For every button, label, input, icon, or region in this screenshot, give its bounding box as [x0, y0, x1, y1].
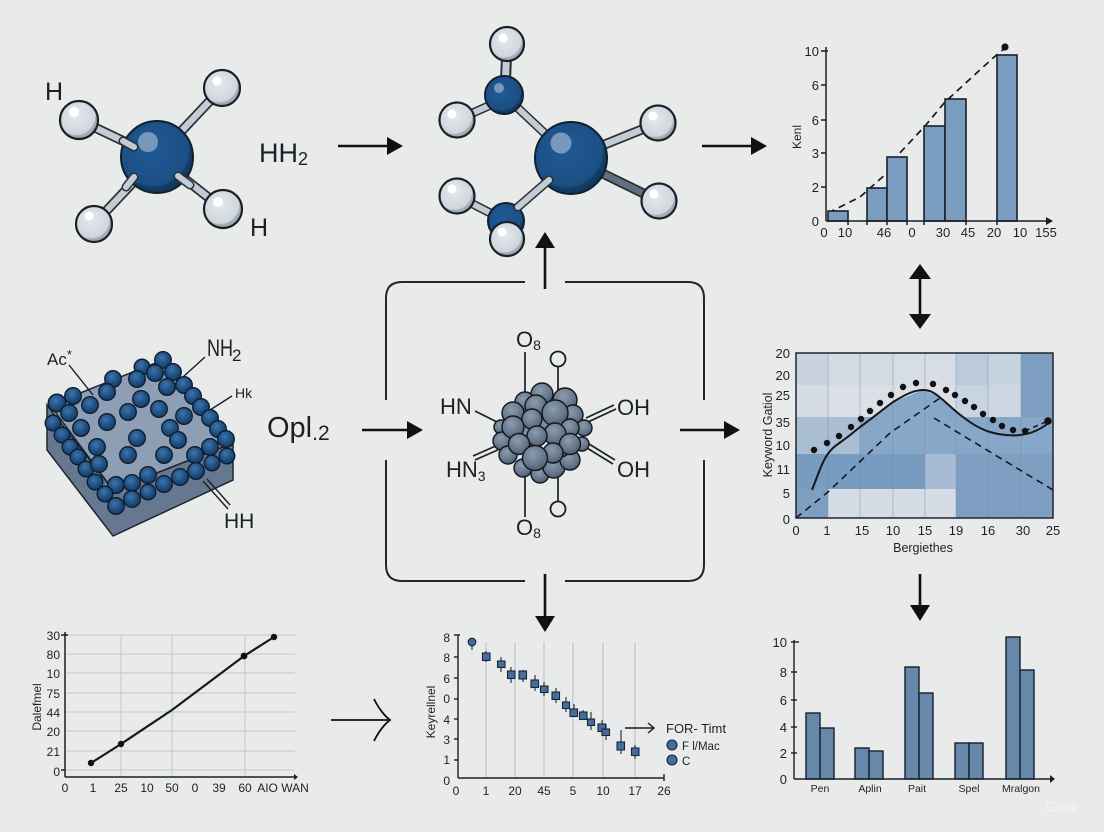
- scatter chart: bottom center: 26: [657, 784, 671, 798]
- legend: FOR- Timt: C: [682, 756, 690, 768]
- axis labels: 5: [783, 486, 790, 501]
- axis labels: 10: [805, 44, 819, 59]
- line chart: bottom left: 44: [47, 706, 60, 720]
- axis labels: 30: [1016, 523, 1030, 538]
- label: Ac*: *: [67, 347, 72, 362]
- axis labels: 16: [981, 523, 995, 538]
- axis labels: 20: [776, 368, 790, 383]
- scatter chart: bottom center: 20: [508, 784, 522, 798]
- line chart: bottom left: 30: [47, 629, 60, 643]
- axis labels: 0: [908, 225, 916, 240]
- curves: [796, 398, 940, 518]
- arrow: to top bar chart: [702, 137, 767, 155]
- legend: FOR- Timt: FOR- Timt: [666, 721, 726, 736]
- arrow: down from frame: [535, 574, 555, 632]
- bar chart: bottom right: 8: [780, 665, 787, 680]
- axes: [821, 47, 1046, 225]
- bar chart: bottom right: 0: [780, 772, 787, 787]
- scatter chart: bottom center: 8: [443, 651, 450, 665]
- bar chart: top right: [790, 43, 1057, 240]
- label: OH top: OH: [617, 395, 650, 420]
- axis labels: 10: [838, 225, 852, 240]
- label: O3 top: O: [516, 327, 533, 352]
- bar chart: bottom right: 10: [773, 635, 787, 650]
- line chart: bottom left: 0: [62, 781, 69, 795]
- data points: [468, 638, 639, 756]
- line chart: bottom left: 1: [90, 781, 97, 795]
- watermark: Grok: [1046, 799, 1079, 816]
- scatter chart: bottom center: [424, 631, 671, 798]
- scatter chart: bottom center: 0: [453, 784, 460, 798]
- axis labels: 6: [812, 78, 819, 93]
- line chart: bottom left: 21: [47, 745, 60, 759]
- axis labels: 0: [820, 225, 828, 240]
- axis labels: 11: [776, 462, 790, 477]
- label: OH bottom: OH: [617, 457, 650, 482]
- line chart: bottom left: 10: [47, 667, 60, 681]
- line chart: bottom left: 75: [47, 687, 60, 701]
- bar chart: bottom right: Aplin: [858, 783, 882, 795]
- axis labels: 0: [792, 523, 800, 538]
- line chart: bottom left: 10: [140, 781, 154, 795]
- axis labels: 10: [886, 523, 900, 538]
- label: Opl2: .2: [312, 422, 330, 445]
- arrow: up from frame: [535, 232, 555, 289]
- scatter chart: bottom center: 6: [443, 672, 450, 686]
- label: Opl2: Opl: [267, 412, 312, 444]
- axis labels: 25: [1046, 523, 1060, 538]
- frame: rounded bracket around nanoparticle: [386, 282, 704, 581]
- axis labels: 20: [987, 225, 1001, 240]
- bar chart: bottom right: Mralgon: [1002, 783, 1040, 795]
- line chart: bottom left: Dalefmel: [30, 683, 44, 731]
- scatter chart: bottom center: 1: [483, 784, 490, 798]
- line chart: bottom left: 25: [114, 781, 128, 795]
- heat chart: middle right: [761, 346, 1060, 555]
- axis labels: [790, 44, 1057, 240]
- heat cells: [796, 353, 1053, 518]
- bar chart: bottom right: 6: [780, 693, 787, 708]
- axis labels: 19: [949, 523, 963, 538]
- axis labels: 15: [855, 523, 869, 538]
- label: HN3: HN: [446, 457, 478, 482]
- scatter chart: bottom center: 0: [443, 692, 450, 706]
- axis labels: 0: [783, 512, 790, 527]
- axis labels: 3: [812, 146, 819, 161]
- arrow: down from heat chart: [910, 574, 930, 621]
- label: HN3: 3: [478, 468, 486, 484]
- label: O3 bottom: 8: [533, 525, 541, 541]
- axis labels: 10: [1013, 225, 1027, 240]
- axis labels: Keyword Gatiol: [761, 393, 775, 477]
- label: H bottom right: H: [250, 214, 268, 242]
- bar chart: bottom right: Pait: [908, 783, 926, 795]
- bar chart: bottom right: [773, 635, 1055, 795]
- label: HH2: 2: [298, 149, 308, 169]
- scatter chart: bottom center: Keyrellnel: [424, 686, 438, 738]
- bar chart: bottom right: 4: [780, 720, 787, 735]
- bar chart: bottom right: Spel: [958, 783, 980, 795]
- axis labels: Kenl: [790, 125, 804, 149]
- line chart: bottom left: AIO WAN: [257, 781, 309, 795]
- callout lines: [69, 357, 232, 509]
- axis labels: 2: [812, 180, 819, 195]
- label: Ac*: Ac: [47, 350, 67, 369]
- arrow: to frame: [362, 421, 423, 439]
- label: NH2 subscript: 2: [232, 346, 241, 365]
- scatter chart: bottom center: 4: [443, 713, 450, 727]
- scatter chart: bottom center: 1: [443, 753, 450, 767]
- dashed trend: [828, 48, 1005, 213]
- label: HH2: HH: [259, 138, 298, 168]
- axis labels: 15: [918, 523, 932, 538]
- scatter chart: bottom center: 45: [537, 784, 551, 798]
- line chart: bottom left: 80: [47, 648, 60, 662]
- axis labels: 25: [776, 388, 790, 403]
- scatter chart: bottom center: 17: [628, 784, 642, 798]
- axis labels: 46: [877, 225, 891, 240]
- slab: nanoparticle-decorated surface: [45, 352, 235, 536]
- nanoparticle with functional groups: [473, 352, 616, 517]
- axis labels: 45: [961, 225, 975, 240]
- axis labels: 6: [812, 113, 819, 128]
- line chart: bottom left: 50: [165, 781, 179, 795]
- axis labels: 0: [812, 214, 819, 229]
- scatter chart: bottom center: 8: [443, 631, 450, 645]
- legend: FOR- Timt: F l/Mac: [682, 741, 720, 753]
- line chart: bottom left: [30, 629, 309, 795]
- legend: FOR- Timt: [625, 721, 726, 768]
- label: HH: HH: [224, 510, 254, 533]
- axis labels: 10: [776, 438, 790, 453]
- arrow: open head: [331, 699, 390, 741]
- label: H top left: H: [45, 78, 63, 106]
- scatter chart: bottom center: 0: [443, 774, 450, 788]
- line chart: bottom left: 60: [238, 781, 252, 795]
- axis labels: 20: [776, 346, 790, 361]
- line chart: bottom left: 39: [212, 781, 226, 795]
- label: Hk: Hk: [235, 385, 253, 401]
- scatter chart: bottom center: 10: [596, 784, 610, 798]
- error bars: [472, 640, 635, 759]
- label: NH2: NH: [207, 335, 233, 362]
- axis labels: 155: [1035, 225, 1057, 240]
- dots: [811, 380, 1052, 453]
- molecule: branched structure: [440, 27, 676, 256]
- scatter chart: bottom center: 5: [570, 784, 577, 798]
- arrow: to heat chart: [680, 421, 740, 439]
- line chart: bottom left: 20: [47, 725, 60, 739]
- axis labels: 35: [776, 415, 790, 430]
- axis labels: [761, 346, 1060, 555]
- line chart: bottom left: 0: [192, 781, 199, 795]
- bonds: [473, 352, 616, 517]
- bar chart: bottom right: 2: [780, 746, 787, 761]
- label: HN: HN: [440, 394, 472, 419]
- cluster spheres: [493, 383, 592, 483]
- label: O3 top: 8: [533, 337, 541, 353]
- bar chart: bottom right: Pen: [811, 783, 829, 795]
- scatter chart: bottom center: 3: [443, 733, 450, 747]
- arrow: to second molecule: [338, 137, 403, 155]
- axis labels: 1: [823, 523, 831, 538]
- axis labels: Bergiethes: [893, 541, 953, 555]
- label: O3 bottom: O: [516, 515, 533, 540]
- bars: [828, 55, 1017, 221]
- molecule: central atom with four hydrogens: [60, 70, 242, 242]
- line chart: bottom left: 0: [53, 765, 60, 779]
- arrow: double headed: [909, 264, 931, 329]
- axis labels: 30: [936, 225, 950, 240]
